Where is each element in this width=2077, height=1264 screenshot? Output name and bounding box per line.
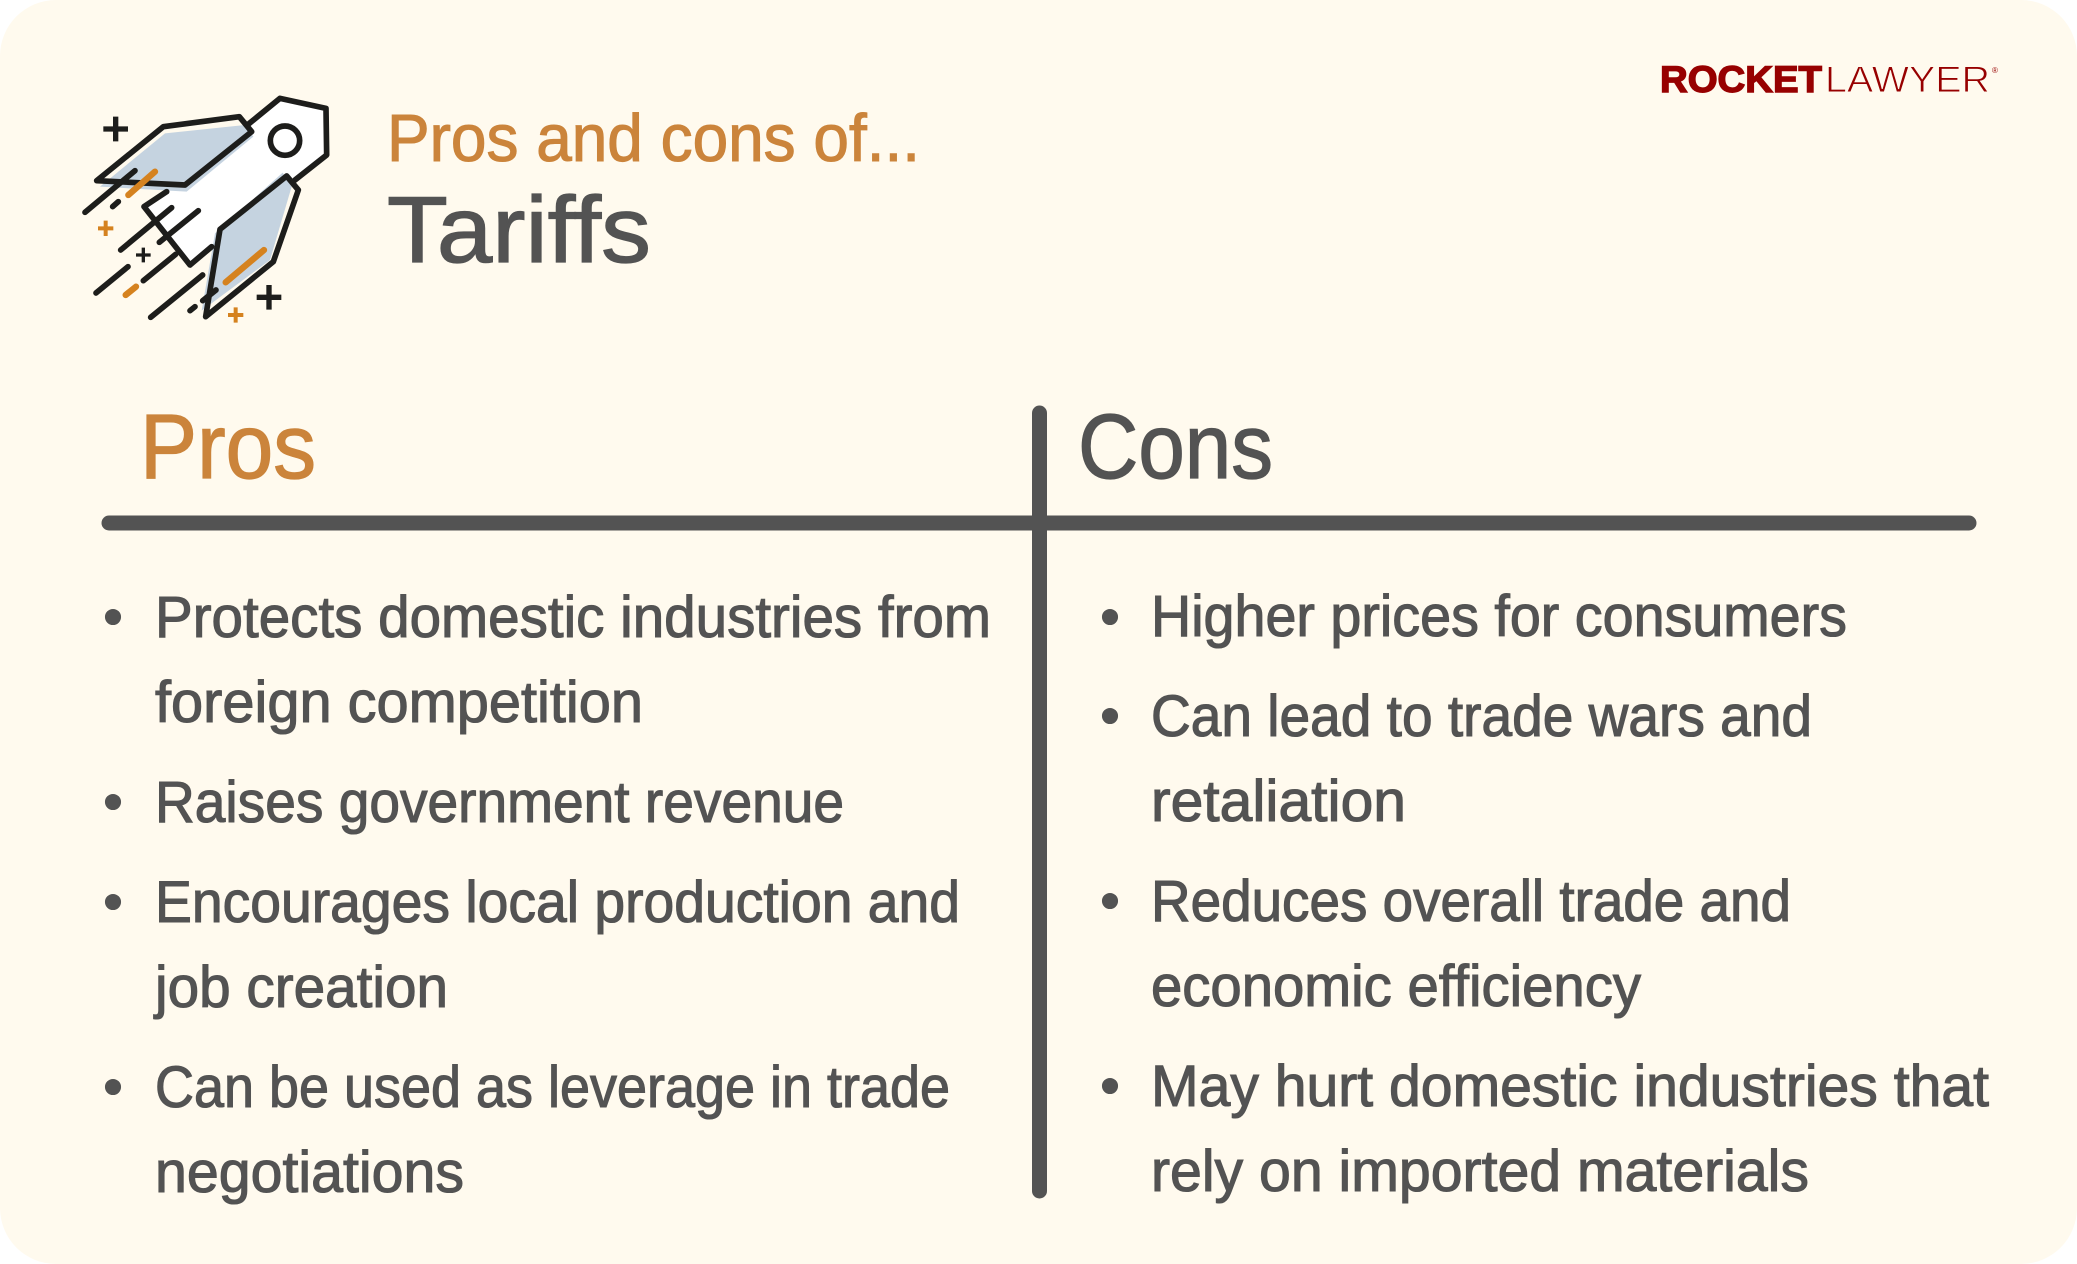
pro 4: Can be used as leverage in trade: [155, 1055, 950, 1120]
pro 1: Protects domestic industries from: [155, 585, 991, 650]
horizontal divider: [109, 516, 1969, 530]
icon: rocket: [85, 98, 327, 323]
pro 4: negotiations: [155, 1140, 464, 1205]
con 2: [1102, 684, 1812, 834]
pro 1: [106, 585, 991, 735]
pros list: [106, 585, 991, 1205]
pro 3: [106, 870, 960, 1020]
con 3: [1102, 869, 1791, 1019]
logo: Rocket Lawyer: ®: [1992, 66, 1998, 75]
con 4: May hurt domestic industries that: [1151, 1054, 1989, 1119]
vertical divider: [1032, 413, 1047, 1191]
logo: Rocket Lawyer: [1660, 59, 1998, 100]
cons heading: Cons: [1078, 396, 1273, 498]
con 3: Reduces overall trade and: [1151, 869, 1791, 934]
con 3: economic efficiency: [1151, 954, 1641, 1019]
con 4: [1102, 1054, 1989, 1204]
pro 2: Raises government revenue: [155, 770, 844, 835]
con 4: rely on imported materials: [1151, 1139, 1809, 1204]
pro 1: foreign competition: [155, 670, 643, 735]
pro 4: [106, 1055, 950, 1205]
con 1: Higher prices for consumers: [1151, 584, 1847, 649]
subtitle: Pros and cons of...: [387, 101, 920, 176]
cons list: [1102, 584, 1989, 1204]
pro 3: Encourages local production and: [155, 870, 960, 935]
logo: Rocket Lawyer: LAWYER: [1825, 59, 1990, 100]
pros heading: Pros: [140, 396, 316, 498]
con 2: Can lead to trade wars and: [1151, 684, 1812, 749]
title: Tariffs: [387, 177, 651, 282]
logo: Rocket Lawyer: ROCKET: [1660, 59, 1822, 100]
con 2: retaliation: [1151, 769, 1406, 834]
pro 3: job creation: [153, 955, 448, 1020]
